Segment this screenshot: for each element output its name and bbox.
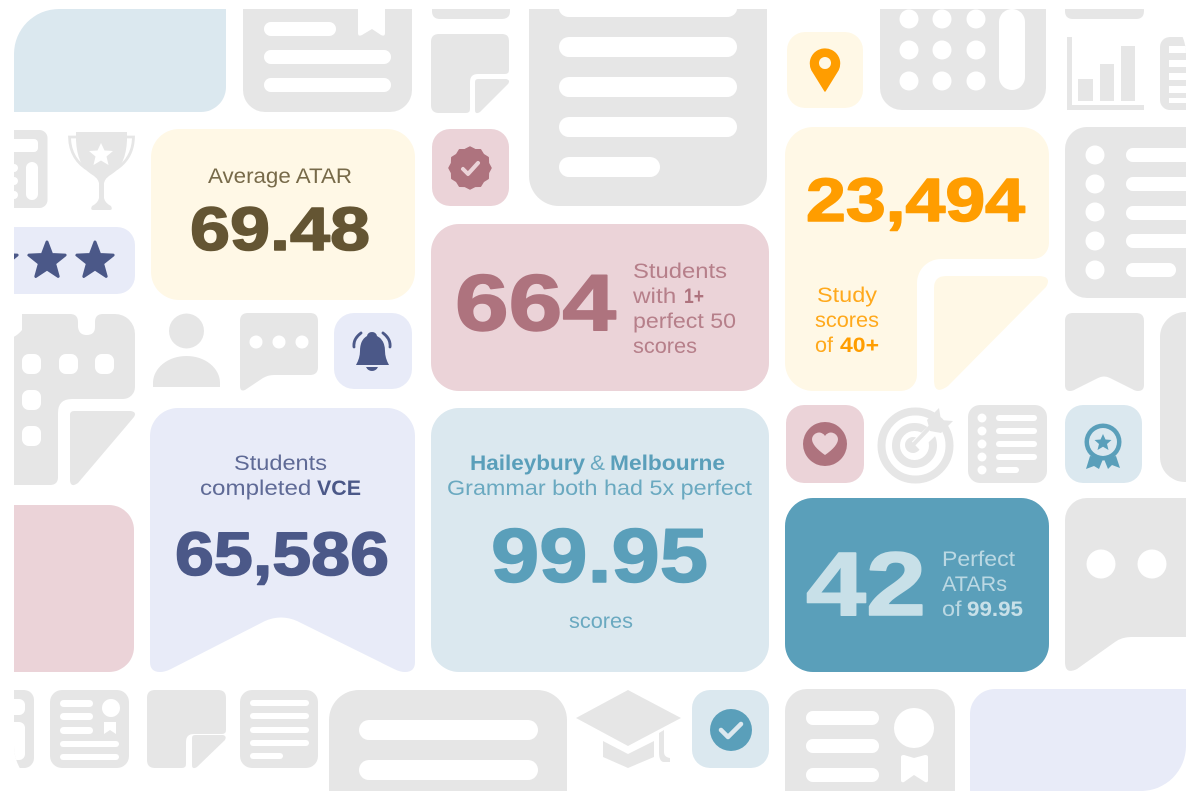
panel: 23,494 study scores: [785, 127, 1049, 391]
panel: Haileybury and Melbourne Grammar: [431, 408, 769, 672]
icon tile: location pin: [787, 32, 863, 108]
stat: 65,586: 65,586: [175, 520, 389, 588]
icon: folded note bottom: [147, 690, 226, 768]
label: Average ATAR: Average ATAR: [208, 165, 352, 188]
description: &: [590, 452, 605, 475]
description: Students: [633, 260, 727, 283]
panel: blank lavender tile: [970, 689, 1200, 800]
stat: 69.48: 69.48: [190, 195, 370, 263]
icon: certificate wide: [785, 689, 955, 800]
panel: stars: [14, 227, 135, 294]
icon: document with bookmark: [243, 0, 412, 112]
icon tile: award ribbon: [1065, 405, 1142, 483]
panel: students completed VCE: [150, 408, 415, 672]
description: Perfect: [942, 548, 1015, 571]
stat: 664: 664: [455, 258, 617, 347]
description: of: [815, 334, 839, 357]
icon: dotted keypad: [880, 0, 1046, 110]
icon: folded note top: [431, 0, 510, 113]
icon tile: heart: [786, 405, 864, 483]
description: Melbourne: [610, 452, 725, 475]
description: Grammar both had 5x perfect: [447, 477, 752, 500]
panel: blue blank tile: [14, 9, 226, 112]
stat: 23,494: 23,494: [806, 166, 1025, 234]
icon: top right fragment: [1065, 9, 1144, 19]
icon tile: bell: [334, 313, 412, 389]
icon: bottom left fragment: [0, 690, 34, 768]
description: 1+: [684, 285, 704, 308]
description: Study: [817, 284, 878, 307]
icon: bar chart: [1067, 37, 1144, 110]
description: Students: [234, 452, 327, 475]
icon: large chat bubble: [1065, 498, 1200, 671]
panel: average ATAR: [151, 129, 415, 300]
icon: list with bullets: [1065, 127, 1186, 298]
description: scores: [633, 335, 697, 358]
stat: 99.95: 99.95: [491, 514, 708, 599]
description: ATARs: [942, 573, 1007, 596]
icon: chat bubble with three dots: [240, 313, 318, 390]
label: scores: scores: [569, 610, 633, 633]
icon: large text document: [529, 0, 767, 206]
description: perfect 50: [633, 310, 736, 333]
stat: 42: 42: [806, 535, 926, 635]
icon: yellow folded corner: [934, 276, 1048, 390]
panel: 664 students: [431, 224, 769, 391]
description: VCE: [317, 477, 361, 500]
description: scores: [815, 309, 879, 332]
description: 40+: [840, 334, 879, 357]
icon: text document card: [240, 690, 318, 768]
description: 99.95: [967, 598, 1023, 621]
panel: 42 perfect ATARs: [785, 498, 1049, 672]
icon: right side fragment: [1160, 312, 1186, 482]
description: completed: [200, 477, 318, 500]
icon: list card: [968, 405, 1047, 483]
icon: calculator fragment: [14, 130, 48, 208]
icon: person: [153, 314, 220, 387]
icon: trophy: [70, 132, 134, 210]
icon: puzzle block: [14, 314, 135, 485]
description: Haileybury: [470, 452, 585, 475]
panel: blank rose tile: [14, 505, 134, 672]
icon: certificate document: [50, 690, 129, 768]
icon tile: verified badge: [432, 129, 509, 206]
description: of: [942, 598, 968, 621]
icon: target with arrow: [882, 408, 953, 480]
icon: bookmark grey: [1065, 313, 1144, 391]
icon tile: check mark: [692, 690, 769, 768]
icon: wide document bottom: [329, 690, 567, 800]
description: with: [632, 285, 683, 308]
icon: star ratings: [0, 242, 113, 276]
icon: cropped list at right: [1160, 37, 1186, 110]
icon: graduation cap: [576, 690, 681, 768]
